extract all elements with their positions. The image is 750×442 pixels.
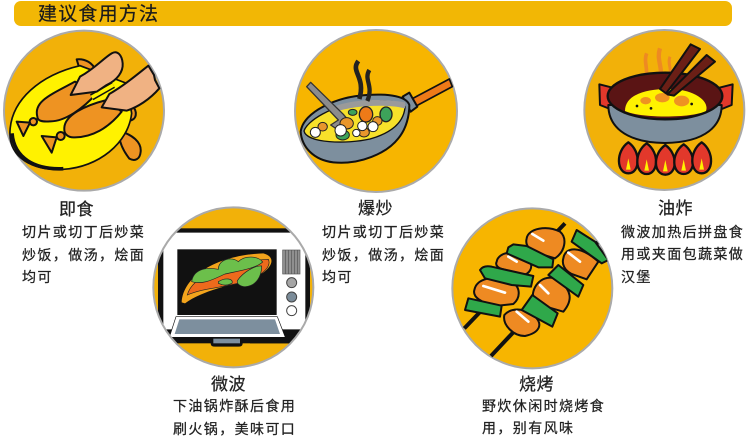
panel: grilling (452, 208, 612, 436)
text block: 爆炒 description: 均可 (322, 269, 353, 285)
icon: pot over flames (584, 30, 744, 190)
text block: 油炸 description: 汉堡 (621, 269, 652, 285)
title banner: 建议食用方法 (38, 3, 159, 25)
icon: wok with vegetables (295, 30, 457, 192)
text block: 即食 description: 炒饭，做汤，烩面 (22, 247, 145, 263)
text block: 油炸 description: 微波加热后拼盘食 (621, 224, 744, 240)
text block: 烧烤 description: 野炊休闲时烧烤食 (482, 398, 605, 414)
icon: sausages on plate (4, 31, 164, 191)
heading: 爆炒: 爆炒 (358, 199, 393, 218)
text block: 即食 description: 切片或切丁后炒菜 (22, 224, 145, 240)
title banner (14, 1, 732, 26)
panel: direct eating (4, 31, 164, 285)
heading: 即食: 即食 (59, 200, 94, 219)
text block: 即食 description: 均可 (22, 269, 53, 285)
text block: 微波 description: 刷火锅，美味可口 (173, 421, 296, 437)
text block: 烧烤 description: 用，别有风味 (482, 420, 574, 436)
text block: 爆炒 description: 切片或切丁后炒菜 (322, 224, 445, 240)
text block: 油炸 description (621, 224, 744, 285)
text block: 即食 description (22, 224, 145, 285)
panel: microwave (153, 207, 317, 437)
panel: stir fry (295, 30, 457, 285)
heading: 烧烤: 烧烤 (519, 375, 554, 394)
text block: 微波 description: 下油锅炸酥后食用 (173, 398, 296, 414)
heading: 微波: 微波 (211, 375, 246, 394)
text block: 油炸 description: 用或夹面包蔬菜做 (621, 246, 744, 262)
panel: deep frying (584, 30, 744, 285)
icon: skewers (452, 208, 612, 368)
text block: 爆炒 description: 炒饭，做汤，烩面 (322, 247, 445, 263)
icon: microwave oven (153, 207, 317, 367)
heading: 油炸: 油炸 (658, 199, 693, 218)
text block: 微波 description (173, 398, 296, 437)
text block: 烧烤 description (482, 398, 605, 436)
text block: 爆炒 description (322, 224, 445, 285)
